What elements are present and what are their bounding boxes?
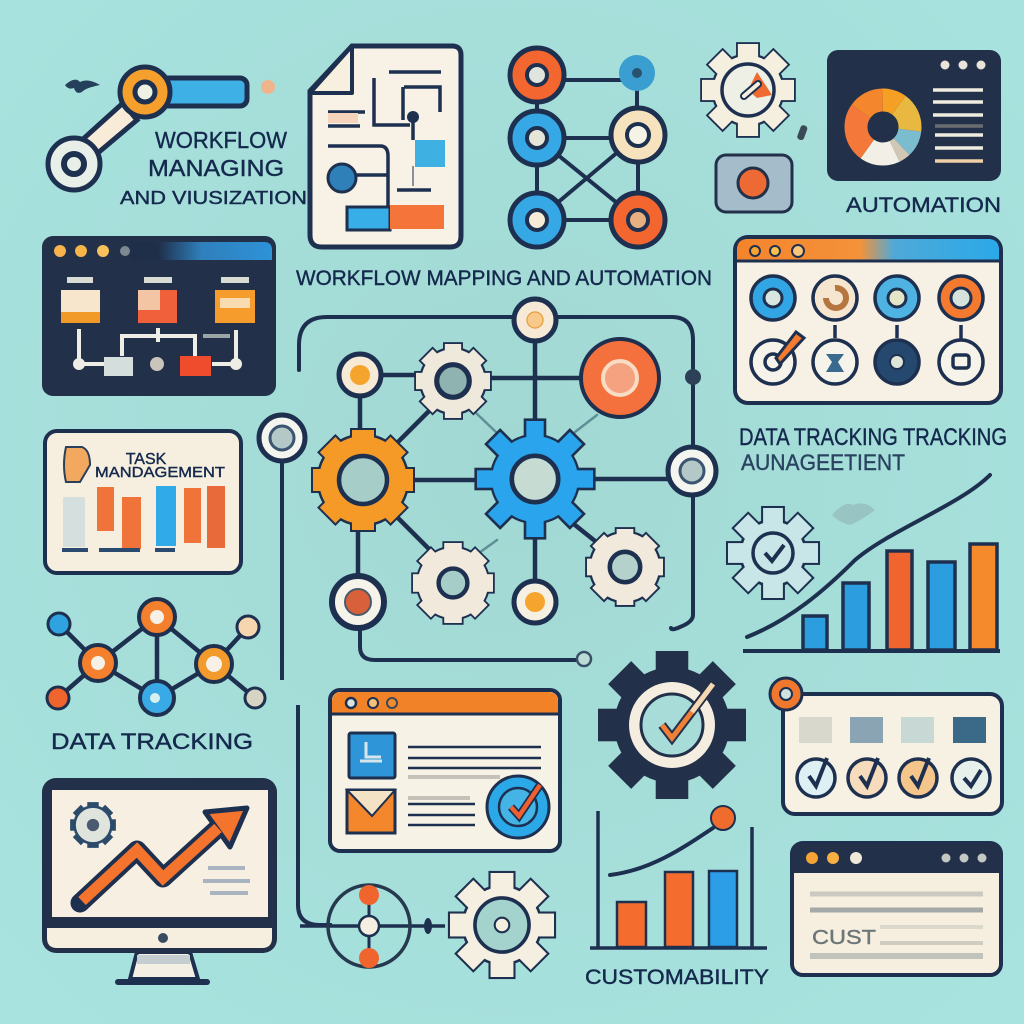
chart: growth bars <box>743 475 1000 651</box>
icon: small gear <box>71 803 115 847</box>
node: left ring <box>259 415 305 461</box>
monitor body <box>42 778 277 953</box>
icon: check gear right <box>728 508 818 598</box>
heading: customability: CUSTOMABILITY <box>585 966 769 989</box>
icon: node network top <box>510 48 665 247</box>
heading: workflow managing: WORKFLOW <box>155 127 287 153</box>
arrow <box>80 808 247 903</box>
node: orange large <box>581 339 659 417</box>
icon: bottom gear <box>450 873 554 977</box>
connector lines left <box>282 461 332 925</box>
heading: data tracking <box>739 424 1007 475</box>
node: top <box>514 299 556 341</box>
panel: task management: TASK <box>126 451 167 468</box>
node: bottom amber <box>514 581 556 623</box>
node: end ring <box>577 652 591 666</box>
icon: dark check gear <box>598 651 746 799</box>
panel: customization window: CUST <box>812 927 876 949</box>
diagram: central gear network <box>259 299 716 666</box>
panel: checklist <box>770 678 1002 814</box>
heading: data tracking left: DATA TRACKING <box>51 729 253 754</box>
gear: cream bottom <box>413 543 493 623</box>
panel: dark flowchart window <box>42 236 276 396</box>
panel: task management: MANDAGEMENT <box>95 464 225 481</box>
gear: blue <box>477 421 593 537</box>
icon: network circle <box>300 885 445 968</box>
panel: dashboard donut <box>827 50 1001 181</box>
icon: automation gear <box>702 44 794 136</box>
icon: envelope <box>347 790 395 833</box>
icon: device <box>716 124 808 212</box>
icon: data tracking network <box>47 599 265 715</box>
node: bottom left check <box>332 576 384 628</box>
heading: automation: AUTOMATION <box>846 194 1001 217</box>
heading: data tracking: AUNAGEETIENT <box>741 450 905 475</box>
heading: workflow managing <box>120 127 307 208</box>
panel: workflow document <box>310 46 461 247</box>
icon: blue check <box>487 776 549 838</box>
chart: customability <box>590 806 767 948</box>
panel: customization window <box>792 843 1001 975</box>
chart: donut <box>856 100 910 154</box>
panel: task management <box>45 431 241 573</box>
icon: blue square <box>349 733 395 778</box>
heading: workflow mapping and automation: WORKFLOW MAPPING AND AUTOMATION <box>296 267 712 290</box>
icon: workflow connector <box>48 67 275 190</box>
panel: icon grid window <box>735 237 1001 403</box>
panel: monitor chart <box>42 778 277 985</box>
gear: cream top <box>416 344 490 418</box>
monitor stand <box>115 952 210 985</box>
gear: orange <box>313 430 413 530</box>
gear: cream right <box>587 529 663 605</box>
node: amber left <box>339 354 381 396</box>
node: right ring <box>668 447 716 495</box>
heading: workflow managing: AND VIUSIZATION <box>120 188 307 208</box>
panel: message window <box>330 690 560 851</box>
heading: workflow managing: MANAGING <box>148 155 284 181</box>
